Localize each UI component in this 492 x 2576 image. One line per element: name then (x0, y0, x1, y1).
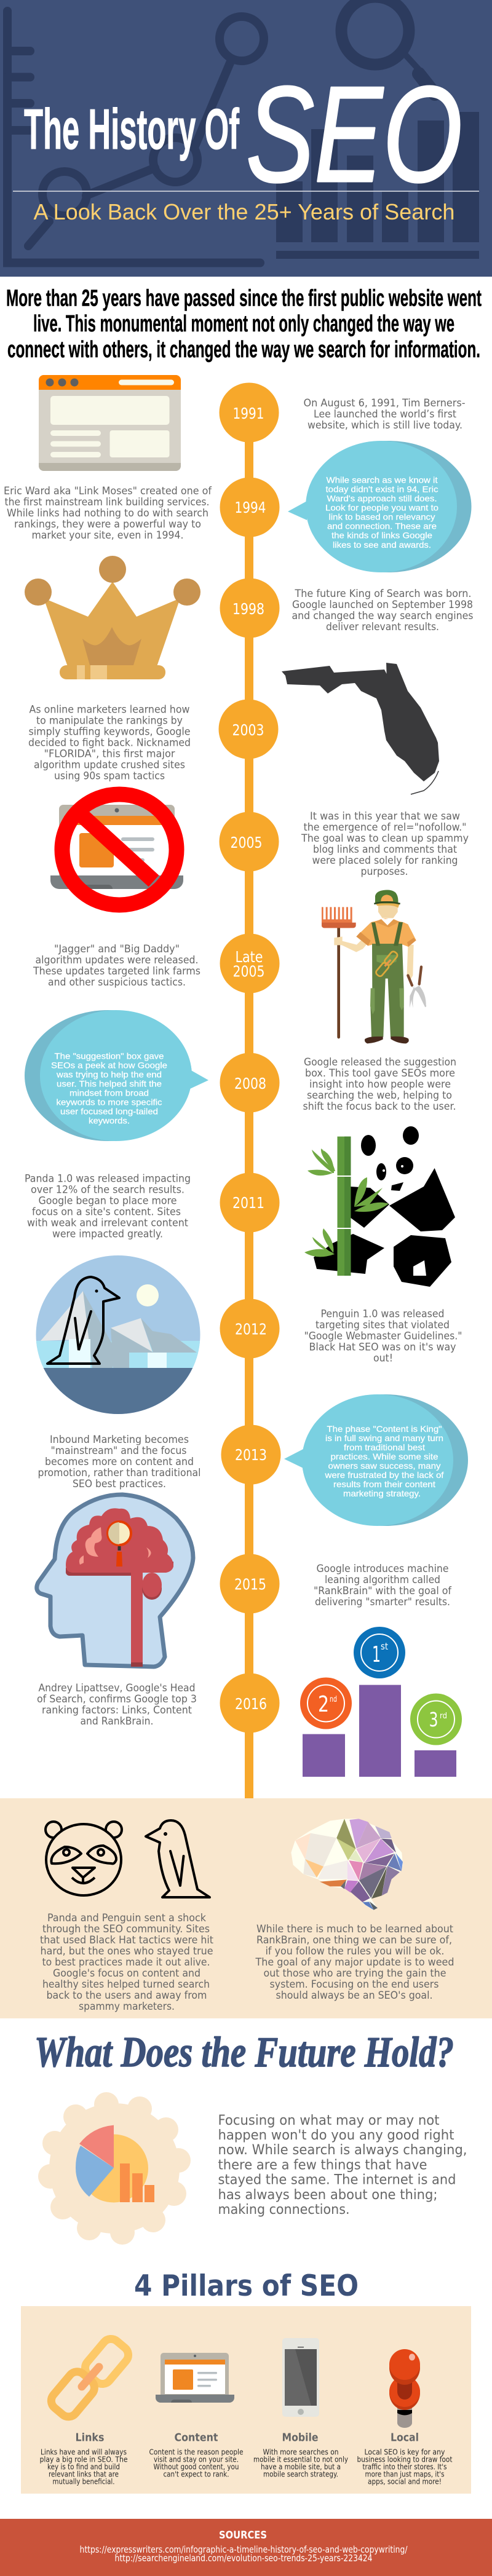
subtitle: A Look Back Over the 25+ Years of Search (33, 199, 455, 224)
text: 2013: Inbound Marketing becomes (50, 1434, 189, 1445)
boots (365, 1037, 409, 1043)
text: late 2005 (33, 943, 200, 988)
callout text: marketing strategy. (343, 1488, 421, 1498)
text: rankbrain: RankBrain, one thing we can be sure of, (256, 1934, 452, 1946)
medal: 3rd (410, 1693, 462, 1745)
text: 1991: On August 6, 1991, Tim Berners- (304, 397, 466, 409)
callout text: likes to see and awards. (333, 540, 431, 550)
text: 2016: ranking factors: Links, Content (42, 1704, 192, 1716)
year 2003 (219, 700, 278, 759)
medal: 3rd: 3 (429, 1708, 438, 1731)
callout text: practices. While some site (331, 1452, 438, 1461)
text: 2013: promotion, rather than traditional (38, 1467, 200, 1479)
overalls (370, 944, 404, 1037)
text: 2016: of Search, confirms Google top 3 (37, 1693, 197, 1705)
text: 2015: "RankBrain" with the goal of (314, 1585, 452, 1597)
text: 2003: algorithm update crushed sites (34, 759, 185, 771)
icon: low-poly brain (291, 1819, 403, 1910)
text: 1991: Lee launched the world’s first (314, 408, 456, 420)
text: 2015: leaning algorithm called (325, 1574, 440, 1586)
text: 2012: Penguin 1.0 was released (321, 1308, 444, 1319)
callout text: Look for people you want to (325, 503, 438, 513)
text: 2003: using 90s spam tactics (54, 770, 165, 782)
callout text: While search as we know it (326, 475, 438, 485)
pillar: mobile: have a mobile site, but a (261, 2462, 341, 2471)
medal: 1st: 1 (372, 1642, 381, 1667)
text: 1991: website, which is still live today. (308, 419, 462, 431)
text: 2008: shift the focus back to the user. (303, 1100, 456, 1112)
shears (408, 967, 426, 1008)
text: 2008: searching the web, helping to (307, 1089, 452, 1101)
text: 2012: targeting sites that violated (315, 1319, 450, 1330)
icon: chain links (47, 2335, 132, 2420)
text: 2015 (314, 1563, 452, 1608)
year 2003: 2003 (232, 721, 264, 739)
year late 2005 (220, 933, 279, 994)
chart: ranking podium (300, 1627, 462, 1777)
text: rankbrain: out those who are trying the gain the (263, 1967, 446, 1979)
text: panda and penguin: that used Black Hat tactics were hit (40, 1934, 214, 1946)
text: 2005: The goal was to clean up spammy (301, 832, 469, 844)
text: late 2005: "Jagger" and "Big Daddy" (54, 943, 180, 955)
pillar: content: Content is the reason people (149, 2447, 244, 2456)
text: 2015: Google introduces machine (316, 1563, 449, 1574)
year 2012: 2012 (235, 1321, 267, 1338)
text: 1998: Google launched on September 1998 (292, 599, 473, 610)
callout text: SEOs a peek at how Google (51, 1060, 167, 1070)
year 1994 (220, 477, 279, 537)
pillar: mobile: mobile search strategy. (263, 2469, 338, 2478)
icon: mobile phone (282, 2338, 319, 2417)
year 2013: 2013 (235, 1446, 267, 1464)
brain (66, 1508, 173, 1667)
callout text: results from their content (333, 1479, 435, 1489)
callout text: Ward's approach still does. (327, 494, 437, 504)
icon: laptop (156, 2353, 234, 2403)
year 2016: 2016 (235, 1695, 267, 1713)
text: 2008: Google released the suggestion (304, 1056, 456, 1068)
icon: gardener (322, 890, 426, 1043)
text: 2016 (37, 1682, 197, 1727)
year late 2005: 2005 (232, 963, 264, 980)
text: 2011 (25, 1173, 191, 1239)
icon: push pin (389, 2349, 420, 2428)
panel: panda penguin rankbrain summary (0, 1798, 492, 2018)
year 2005: 2005 (230, 834, 262, 851)
year 2015 (220, 1554, 279, 1613)
text: 2003: decided to fight back. Nicknamed (28, 737, 191, 749)
text: future: making connections. (218, 2202, 349, 2218)
year 1998: 1998 (232, 600, 264, 618)
text: 2008: insight into how people were (309, 1078, 451, 1090)
neck and face (381, 919, 394, 925)
text: future: Focusing on what may or may not (218, 2113, 440, 2128)
year 1998 (220, 578, 279, 638)
medal: 3rd: rd (440, 1712, 447, 1721)
footer: sources: http://searchengineland.com/evolution-seo-trends-25-years-223424 (114, 2553, 373, 2564)
pillar: content: visit and stay on your site. (154, 2454, 239, 2463)
text: panda and penguin: through the SEO community. Sites (42, 1923, 210, 1935)
text: rankbrain: The goal of any major update is to weed (255, 1956, 454, 1968)
text: 1991 (304, 397, 466, 431)
callout text: link to based on relevancy (328, 512, 435, 522)
text: future: now. While search is always changing, (218, 2143, 467, 2158)
pillar: local: Local SEO is key for any (364, 2447, 445, 2456)
pillar: local: apps, social and more! (368, 2477, 442, 2486)
chain on bib (375, 950, 399, 978)
text: late 2005: These updates targeted link farms (33, 965, 200, 977)
background chart illustration (7, 0, 435, 263)
text: 2012: out! (373, 1353, 393, 1364)
year 2012 (220, 1298, 279, 1359)
callout text: mindset from broad (69, 1088, 149, 1098)
callout: 2013 bubble (284, 1394, 468, 1526)
pillar: links: Links have and will always (41, 2447, 127, 2456)
year 2008: 2008 (234, 1075, 266, 1092)
pillar: local: Local (391, 2432, 419, 2444)
text: future: has always been about one thing; (218, 2187, 438, 2203)
pillar: links: key is to find and build (47, 2462, 120, 2471)
title (24, 58, 462, 211)
year 1991: 1991 (232, 405, 264, 422)
text: 2003: "FLORIDA", this first major (44, 748, 175, 760)
text: 2008 (303, 1056, 456, 1112)
timeline spine (245, 413, 253, 1798)
icon: Florida map (282, 663, 439, 794)
text: 2005: It was in this year that we saw (310, 810, 460, 822)
medal: 2nd (300, 1677, 352, 1729)
arms and hands (334, 936, 414, 981)
callout: 2008 bubble (25, 1010, 208, 1141)
text: panda and penguin: spammy marketers. (79, 2001, 175, 2012)
text: future: stayed the same. The internet is and (218, 2173, 456, 2188)
text: panda and penguin: hard, but the ones who stayed true (41, 1945, 213, 1957)
text: 2005: the emergence of rel="nofollow." (304, 821, 466, 833)
title: The History Of (24, 97, 240, 161)
icon: laptop with no sign (50, 794, 183, 905)
pillar: links: relevant links that are (49, 2469, 119, 2478)
text: rankbrain: should always be an SEO's goal. (276, 1989, 433, 2001)
text: panda and penguin: to best practices made it out alive. (42, 1956, 210, 1968)
pillar: content: Without good content, you (154, 2462, 239, 2471)
timeline year markers (219, 382, 280, 1732)
year late 2005: Late (235, 948, 263, 966)
text: 1994: market your site, even in 1994. (32, 529, 183, 541)
text: late 2005: and other suspicious tactics. (48, 976, 186, 988)
text: panda and penguin (40, 1912, 214, 2012)
text: 1994: rankings, they were a powerful way to (14, 518, 201, 530)
callout text: The "suggestion" box gave (54, 1051, 164, 1061)
icon: penguin outline (146, 1820, 210, 1897)
panel: 4 pillars (21, 2306, 471, 2494)
year 2011 (220, 1173, 279, 1232)
intro paragraph (6, 285, 482, 363)
callout text: user. This helped shift the (57, 1078, 162, 1088)
pillar: mobile: With more searches on (263, 2447, 338, 2456)
icon: head with brain (37, 1495, 193, 1667)
medal: 1st: st (381, 1641, 388, 1652)
year 2005 (219, 812, 279, 872)
callout text: owners saw success, many (328, 1461, 440, 1471)
callout text (51, 1051, 167, 1125)
callout text: keywords. (89, 1115, 130, 1125)
callout text: is in full swing and many turn (325, 1433, 443, 1443)
text: 2013: becomes more on content and (45, 1456, 194, 1468)
pillar: mobile (253, 2432, 348, 2478)
callout text: the kinds of links Google (331, 531, 432, 540)
text: 2013: SEO best practices. (73, 1478, 166, 1490)
pillar: local: more than just maps, it's (365, 2469, 444, 2478)
icon: browser window (39, 375, 181, 471)
year 1991 (219, 382, 279, 443)
callout text: keywords to more specific (57, 1097, 162, 1107)
icon: penguin scene (36, 1255, 200, 1415)
text: panda and penguin: back to the users and away from (47, 1989, 207, 2001)
rake (322, 907, 356, 1038)
text: 1998: deliver relevant results. (326, 621, 439, 633)
text: 1998 (292, 588, 474, 633)
text: future: happen won't do you any good right (218, 2128, 454, 2143)
footer: sources (0, 2519, 492, 2576)
text: 1994 (4, 485, 212, 541)
text: 2003: simply stuffing keywords, Google (28, 725, 191, 738)
text: panda and penguin: healthy sites helped turned search (42, 1978, 210, 1990)
text: late 2005: algorithm updates were released. (36, 954, 198, 966)
text: 2012 (304, 1308, 462, 1364)
text: future: there are a few things that have (218, 2158, 427, 2173)
callout text: user focused long-tailed (60, 1107, 158, 1116)
callout text: from traditional best (344, 1442, 425, 1452)
text: 1994: While links had nothing to do with search (7, 507, 208, 519)
header banner (0, 0, 492, 277)
year 2011: 2011 (232, 1194, 264, 1212)
text: rankbrain: While there is much to be learned about (256, 1923, 454, 1935)
heading: 4 pillars: 4 Pillars of SEO (134, 2269, 359, 2303)
pillar: local (357, 2432, 453, 2486)
text: 2005: blog links and comments that (313, 844, 458, 855)
pillar: links: play a big role in SEO. The (39, 2454, 128, 2463)
text: panda and penguin: Google's focus on content and (53, 1967, 200, 1979)
pillar: links (39, 2432, 128, 2486)
callout: 1994 bubble (288, 441, 471, 572)
text: 2011: were impacted greatly. (52, 1228, 163, 1239)
text: 2011: Panda 1.0 was released impacting (25, 1173, 191, 1184)
callout text (325, 475, 438, 550)
callout text (324, 1424, 444, 1498)
text: 2012: Black Hat SEO was on it's way (309, 1341, 456, 1353)
text: 2015: delivering "smarter" results. (315, 1596, 450, 1608)
pillar: links: Links (75, 2432, 105, 2444)
cap (375, 890, 398, 903)
icon: panda outline (46, 1822, 122, 1895)
text: rankbrain (255, 1923, 454, 2001)
year 2015: 2015 (234, 1576, 266, 1594)
shirt (356, 919, 416, 947)
year 2016 (220, 1673, 279, 1732)
text: rankbrain: system. Focusing on the end users (269, 1978, 439, 1990)
callout text: was trying to help the end (56, 1069, 162, 1079)
text: 2003: to manipulate the rankings by (36, 714, 183, 727)
pillar: content: Content (175, 2432, 218, 2444)
text: 2012: "Google Webmaster Guidelines." (304, 1330, 462, 1341)
year 2013 (221, 1425, 280, 1484)
text: 2005: purposes. (360, 866, 408, 877)
icon: panda with bamboo (304, 1126, 455, 1287)
pillar: links: mutually beneficial. (53, 2477, 114, 2486)
text: 2011: with weak and irrelevant content (27, 1217, 189, 1228)
footer: sources: SOURCES (219, 2529, 267, 2542)
text: future (218, 2113, 467, 2218)
callout text: and connection. These are (327, 521, 437, 531)
callout text: The phase "Content is King" (327, 1424, 442, 1434)
text: 2003 (28, 703, 191, 782)
text: 1994: the first mainstream link building services. (5, 496, 209, 508)
pillar: mobile: Mobile (282, 2432, 319, 2444)
text: 2008: box. This tool gave SEOs more (305, 1067, 455, 1079)
text: panda and penguin: Panda and Penguin sent a shock (47, 1912, 206, 1924)
text: 1998: The future King of Search was born. (295, 588, 471, 599)
year 2008 (220, 1053, 279, 1113)
text: 2005: were placed solely for ranking (312, 855, 458, 866)
callout text: were frustrated by the lack of (324, 1470, 444, 1480)
text: 2011: over 12% of the search results. (31, 1184, 184, 1195)
pillar: content: can't expect to rank. (164, 2469, 229, 2478)
icon: crown (25, 556, 200, 679)
medal: 2nd: nd (330, 1695, 337, 1704)
pillar: mobile: mobile it essential to not only (253, 2454, 348, 2463)
pillar: local: business looking to draw foot (357, 2454, 453, 2463)
text: rankbrain: if you follow the rules you will be ok. (266, 1945, 444, 1957)
text: 2016: Andrey Lipattsev, Google's Head (38, 1682, 196, 1694)
icon: pie chart on wavy badge (38, 2092, 191, 2245)
text: 2011: focus on a site's content. Sites (32, 1206, 181, 1217)
text: 1998: and changed the way search engines (292, 610, 474, 622)
text: 2013 (38, 1434, 200, 1490)
text: 1994: Eric Ward aka "Link Moses" created one of (4, 485, 212, 497)
callout text: today didn't exist in 94, Eric (326, 484, 438, 494)
text: 2011: Google began to place more (38, 1195, 177, 1206)
medal: 2nd: 2 (318, 1692, 329, 1717)
pillar: content (149, 2432, 244, 2478)
text: 2016: and RankBrain. (80, 1715, 154, 1727)
footer: sources: https://expresswriters.com/infographic-a-timeline-history-of-seo-and-web-copywriting/ (80, 2544, 408, 2555)
medal: 1st (354, 1627, 405, 1678)
text: 2005 (301, 810, 469, 877)
pillar: local: traffic into their stores. It's (363, 2462, 446, 2471)
year 1994: 1994 (235, 499, 266, 516)
text: 2003: As online marketers learned how (30, 703, 189, 716)
text: 2013: "mainstream" and the focus (50, 1445, 187, 1456)
